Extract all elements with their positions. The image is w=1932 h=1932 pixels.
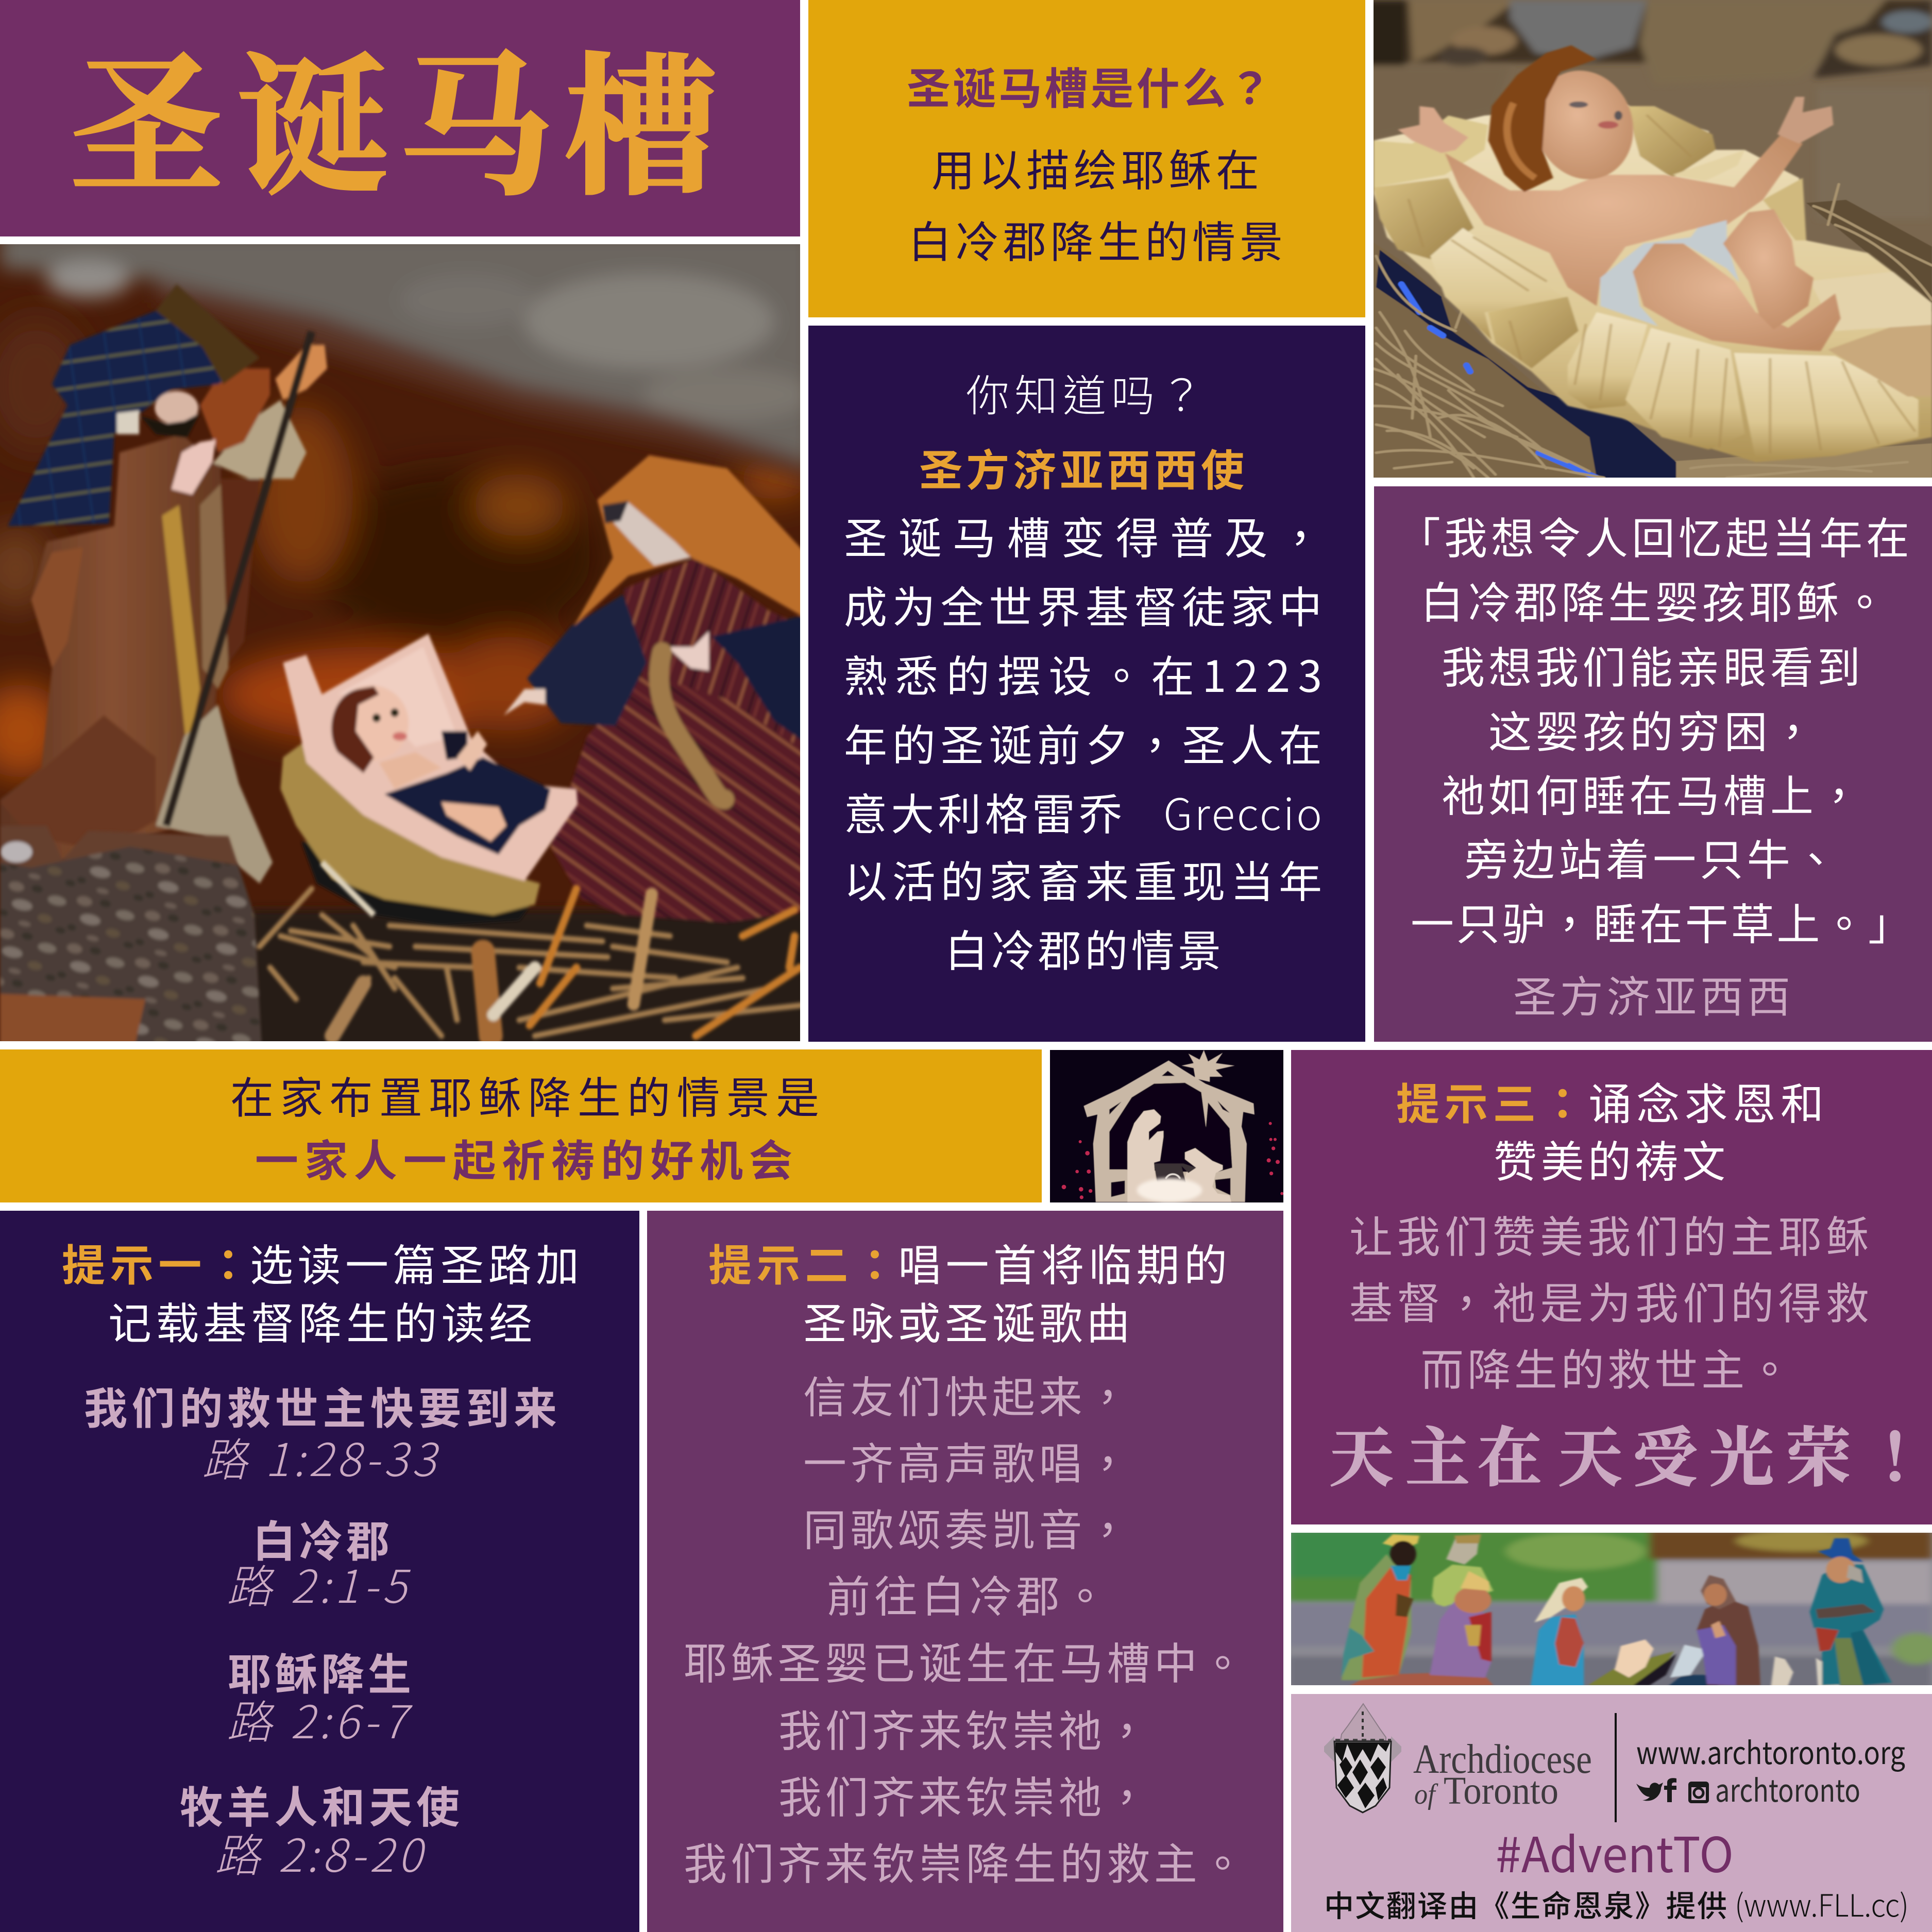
reading list: 路 2:6-7: [227, 1686, 413, 1752]
Mary figure: [504, 455, 815, 923]
straw: [1365, 184, 1932, 489]
tip two heading: 唱一首将临期的: [898, 1231, 1227, 1294]
panel: what is the nativity scene: [808, 0, 1365, 317]
acclamation: 天主在天受光荣！: [1329, 1406, 1927, 1499]
icon: twitter: [1636, 1783, 1663, 1801]
attribution: 圣方济亚西西: [1513, 963, 1790, 1025]
text block: 在家布置耶稣降生的情景是: [230, 1064, 819, 1126]
reading list: 我们的救世主快要到来: [84, 1375, 557, 1437]
quote: [1397, 504, 1911, 953]
text block: 以活的家畜来重现当年: [844, 848, 1322, 910]
panel: Saint Francis quote: [1374, 486, 1932, 1042]
Joseph: [1697, 1599, 1760, 1685]
panel: Archdiocese footer: [1291, 1694, 1932, 1932]
quote: 白冷郡降生婴孩耶稣。: [1420, 569, 1886, 631]
reading list: 耶稣降生: [228, 1640, 411, 1703]
photo: nativity figurines: [1288, 1520, 1932, 1730]
photo: infant Jesus in straw manger: [1365, 0, 1932, 489]
reading list: 白冷郡: [252, 1507, 389, 1570]
song lyrics: 我们齐来钦崇祂，: [778, 1697, 1148, 1759]
Joseph figure: [0, 284, 327, 884]
song lyrics: [684, 1363, 1244, 1892]
translation credit: 中文翻译由《生命恩泉》提供: [1324, 1882, 1727, 1925]
panel: did you know: [808, 326, 1365, 1042]
panel: title: [0, 0, 800, 236]
text block: 白冷郡的情景: [945, 917, 1221, 979]
quote: 祂如何睡在马槽上，: [1442, 762, 1860, 824]
quote: 我想我们能亲眼看到: [1442, 634, 1860, 696]
prayer text: 基督，祂是为我们的得救: [1349, 1269, 1869, 1332]
text block: 白冷郡降生的情景: [908, 208, 1283, 270]
heading: 圣诞马槽是什么？: [907, 55, 1272, 117]
tip two heading: 圣咏或圣诞歌曲: [803, 1290, 1130, 1352]
cow and animals: [1346, 1662, 1494, 1688]
song lyrics: 耶稣圣婴已诞生在马槽中。: [684, 1630, 1244, 1692]
prayer text: [1349, 1203, 1869, 1398]
tip one heading: 选读一篇圣路加: [250, 1231, 579, 1294]
icon: instagram: [1690, 1783, 1707, 1802]
quote: 「我想令人回忆起当年在: [1397, 504, 1909, 567]
manger and infant: [280, 634, 578, 925]
infant and manger: [1588, 1651, 1674, 1685]
tip three heading: 赞美的祷文: [1494, 1128, 1725, 1190]
text block: Greccio: [1163, 781, 1322, 843]
text block: 用以描绘耶稣在: [931, 137, 1259, 199]
reading list: 路 2:1-5: [227, 1551, 411, 1616]
Mary: [1530, 1615, 1584, 1688]
quote: 一只驴，睡在干草上。」: [1411, 890, 1911, 953]
tip three heading: 诵念求恩和: [1588, 1070, 1824, 1132]
logo wordmark: Archdiocese: [1413, 1737, 1592, 1782]
quote: 这婴孩的穷困，: [1488, 698, 1815, 760]
text block: 意大利格雷乔: [844, 781, 1122, 843]
photo: lit silhouette of holy family: [1050, 1050, 1283, 1203]
subheading: 圣方济亚西西使: [919, 436, 1244, 499]
reading list: 牧羊人和天使: [180, 1773, 460, 1836]
translation credit: [1324, 1881, 1909, 1926]
song lyrics: 前往白冷郡。: [827, 1563, 1107, 1625]
photo: nativity scene with Joseph, Mary and the infant: [0, 232, 815, 1056]
panel: tip two: [647, 1211, 1283, 1932]
tip two heading: 提示二：: [708, 1231, 896, 1294]
hashtag: #AdventTO: [1496, 1817, 1734, 1887]
carved wood manger: [1374, 105, 1932, 462]
infant figure: [1398, 45, 1841, 351]
title: 圣诞马槽: [71, 5, 717, 224]
logo wordmark: of Toronto: [1414, 1769, 1558, 1812]
prayer text: 让我们赞美我们的主耶稣: [1349, 1203, 1869, 1265]
tip one heading: [62, 1231, 579, 1352]
reading list: 路 2:8-20: [215, 1820, 427, 1885]
tip one heading: 提示一：: [62, 1231, 250, 1294]
tip one heading: 记载基督降生的读经: [108, 1290, 532, 1352]
tip two heading: [708, 1231, 1227, 1352]
shepherd: [1810, 1565, 1892, 1685]
song lyrics: 一齐高声歌唱，: [803, 1430, 1129, 1492]
panel: family prayer banner: [0, 1049, 1042, 1202]
text block: 熟悉的摆设。在1223: [844, 642, 1322, 705]
text block: 圣诞马槽变得普及，: [844, 504, 1322, 567]
icon: facebook: [1664, 1778, 1676, 1802]
prayer text: 而降生的救世主。: [1420, 1336, 1791, 1398]
reading list: [84, 1375, 557, 1885]
heading: 一家人一起祈祷的好机会: [255, 1127, 792, 1189]
text block: 年的圣诞前夕，圣人在: [844, 711, 1322, 774]
translation credit: (www.FLL.cc): [1735, 1881, 1909, 1926]
rock and straw foreground: [0, 826, 810, 1056]
text block: 成为全世界基督徒家中: [844, 573, 1322, 636]
song lyrics: 我们齐来钦崇降生的救主。: [684, 1830, 1244, 1892]
heading: 你知道吗？: [966, 362, 1203, 424]
quote: 旁边站着一只牛、: [1465, 826, 1837, 888]
icon: archdiocesan crest: [1324, 1704, 1401, 1812]
logo wordmark: [1413, 1737, 1592, 1812]
song lyrics: 同歌颂奏凯音，: [803, 1496, 1129, 1558]
text block: [844, 504, 1322, 979]
panel: tip one: [0, 1211, 639, 1932]
song lyrics: 信友们快起来，: [803, 1363, 1129, 1426]
tip three heading: 提示三：: [1396, 1070, 1584, 1132]
social handle: archtoronto: [1715, 1766, 1860, 1811]
panel: tip three: [1291, 1050, 1932, 1524]
reading list: 路 1:28-33: [202, 1424, 440, 1489]
tip three heading: [1396, 1070, 1824, 1190]
song lyrics: 我们齐来钦崇祂，: [778, 1764, 1148, 1826]
